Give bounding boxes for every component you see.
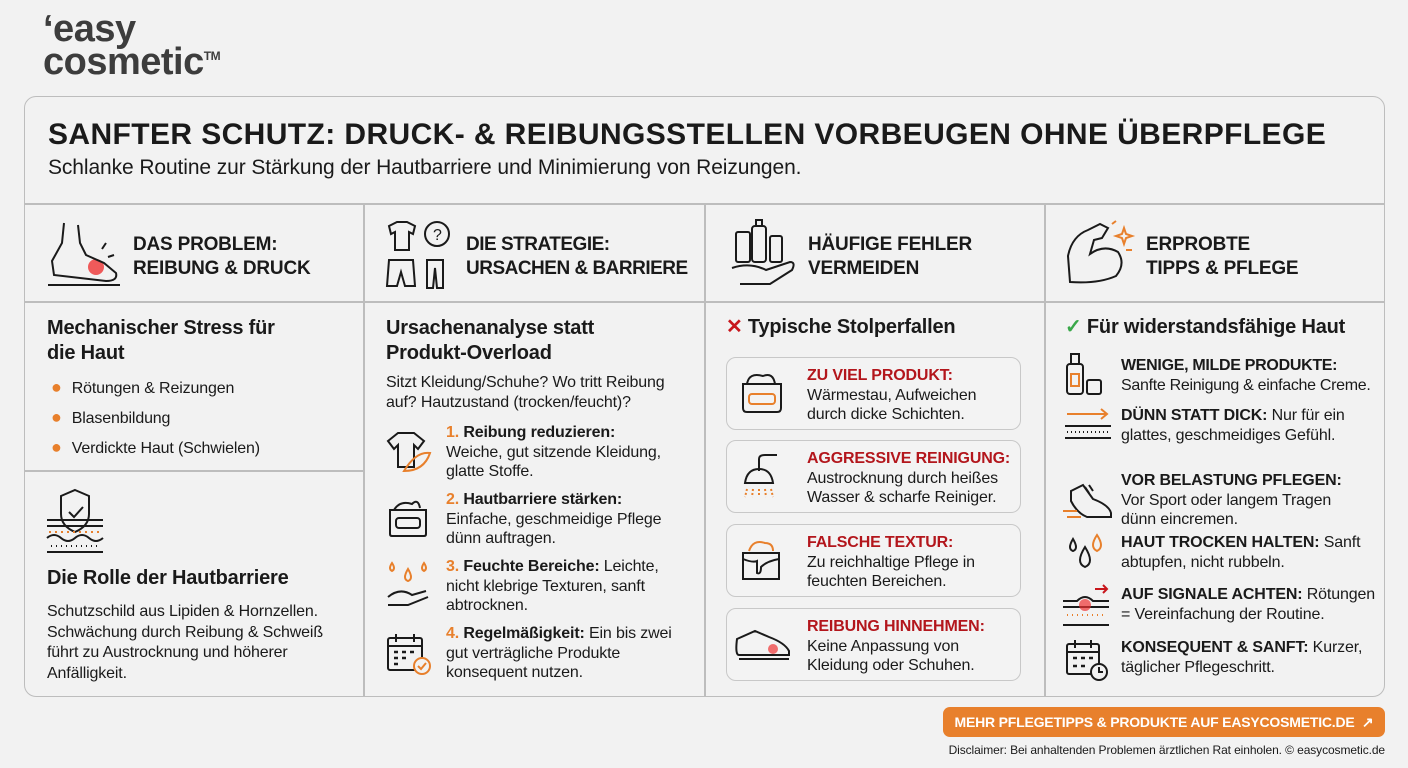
logo: ‘easy: [43, 8, 136, 50]
title: SANFTER SCHUTZ: DRUCK- & REIBUNGSSTELLEN VORBEUGEN OHNE ÜBERPFLEGE: [48, 118, 1326, 151]
box: aggressive reinigung: Austrocknung durch heißes Wasser & scharfe Reiniger.: [807, 470, 998, 506]
tip 4: HAUT TROCKEN HALTEN: Sanft abtupfen, nicht rubbeln.: [1121, 534, 1360, 570]
item 2: 2. Hautbarriere stärken:: [446, 491, 622, 508]
heading: tipps: TIPPS & PFLEGE: [1146, 258, 1298, 279]
panel: hautbarriere: [46, 488, 323, 682]
heading: tipps: ERPROBTE: [1146, 234, 1250, 255]
bullets: ● Verdickte Haut (Schwielen): [51, 437, 260, 457]
tip 2: DÜNN STATT DICK: Nur für ein glattes, geschmeidiges Gefühl.: [1121, 407, 1345, 444]
item 1: 1. Reibung reduzieren:: [446, 424, 615, 441]
box: aggressive reinigung: [726, 440, 1021, 513]
tip 3: [1063, 472, 1342, 528]
tip 1: WENIGE, MILDE PRODUKTE:: [1121, 357, 1337, 374]
heading: problem: [133, 234, 311, 279]
tip 3: Vor Sport oder langem Tragen dünn eincremen.: [1121, 492, 1331, 528]
icon: shield skin: [46, 488, 104, 553]
bullets: ● Rötungen & Reizungen: [51, 377, 234, 397]
logo: [43, 8, 220, 83]
header: fehler: [732, 219, 972, 285]
intro: Sitzt Kleidung/Schuhe? Wo tritt Reibung auf? Hautzustand (trocken/feucht)?: [386, 374, 664, 410]
bullets: ● Blasenbildung: [51, 407, 170, 427]
heading: problem: REIBUNG & DRUCK: [133, 258, 311, 279]
box: aggressive reinigung: AGGRESSIVE REINIGUNG:: [807, 450, 1010, 467]
heading: die Haut: [47, 342, 124, 364]
box: falsche textur: [726, 524, 1021, 597]
grid lines: [24, 203, 1385, 204]
heading: [386, 317, 594, 364]
heading: Die Rolle der Hautbarriere: [47, 567, 289, 589]
icon: foot shoe: [48, 222, 120, 286]
box: zu viel produkt: Wärmestau, Aufweichen durch dicke Schichten.: [807, 386, 976, 423]
heading: Ursachenanalyse statt: [386, 317, 594, 339]
box: reibung hinnehmen: Keine Anpassung von Kleidung oder Schuhen.: [807, 638, 974, 674]
tip 3: VOR BELASTUNG PFLEGEN:: [1121, 472, 1342, 489]
box: reibung hinnehmen: REIBUNG HINNEHMEN:: [807, 618, 985, 635]
heading: Produkt-Overload: [386, 342, 552, 364]
icon: hand with products: [732, 219, 795, 285]
item 4: 4. Regelmäßigkeit: Ein bis zwei gut verträgliche Produkte konsequent nutzen.: [446, 625, 672, 681]
panel: mechanischer stress: [47, 317, 275, 457]
heading: fehler: [808, 233, 972, 279]
button: cta: [943, 707, 1385, 737]
logo: cosmeticTM: [43, 41, 220, 83]
button: cta: MEHR PFLEGETIPPS & PRODUKTE AUF EASYCOSMETIC.DE ↗: [955, 714, 1373, 730]
box: zu viel produkt: [726, 357, 1021, 430]
heading: strategie: [466, 234, 688, 279]
box: reibung hinnehmen: [726, 608, 1021, 681]
tip 1: Sanfte Reinigung & einfache Creme.: [1121, 376, 1371, 394]
icon: clothes: [386, 221, 450, 289]
bullets: [51, 377, 260, 457]
tip 1: [1066, 353, 1371, 395]
disclaimer: Disclaimer: Bei anhaltenden Problemen ärztlichen Rat einholen. © easycosmetic.de: [949, 743, 1385, 757]
item 2: Einfache, geschmeidige Pflege dünn auftragen.: [446, 510, 661, 547]
subtitle: Schlanke Routine zur Stärkung der Hautbarriere und Minimierung von Reizungen.: [48, 156, 801, 179]
heading: [47, 317, 275, 364]
panel: strategie: [386, 317, 672, 681]
item 2: [389, 491, 661, 547]
box: falsche textur: Zu reichhaltige Pflege in feuchten Bereichen.: [807, 554, 975, 590]
tip 6: KONSEQUENT & SANFT: Kurzer, täglicher Pflegeschritt.: [1121, 639, 1362, 676]
heading: fehler: VERMEIDEN: [808, 258, 919, 279]
heading: ✓ Für widerstandsfähige Haut: [1065, 316, 1345, 338]
heading: strategie: URSACHEN & BARRIERE: [466, 258, 688, 279]
box: zu viel produkt: ZU VIEL PRODUKT:: [807, 367, 953, 384]
item 1: Weiche, gut sitzende Kleidung, glatte Stoffe.: [446, 444, 661, 480]
heading: strategie: DIE STRATEGIE:: [466, 234, 610, 255]
heading: tipps: [1146, 234, 1298, 279]
icon: arm muscle: [1067, 220, 1135, 284]
panel: stolperfallen heading: ✕ Typische Stolperfallen: [726, 316, 955, 338]
icon: clothes: ?: [433, 227, 442, 244]
box: falsche textur: FALSCHE TEXTUR:: [807, 534, 953, 551]
header: tipps: [1067, 220, 1298, 284]
item 3: 3. Feuchte Bereiche: Leichte, nicht klebrige Texturen, sanft abtrocknen.: [446, 558, 659, 614]
item 1: [386, 424, 661, 480]
header: strategie: [386, 221, 688, 289]
paragraph: Schutzschild aus Lipiden & Hornzellen. Schwächung durch Reibung & Schweiß führt zu Austrocknung und höherer Anfälligkeit.: [47, 603, 323, 682]
heading: problem: DAS PROBLEM:: [133, 234, 277, 255]
heading: Mechanischer Stress für: [47, 317, 275, 339]
heading: fehler: HÄUFIGE FEHLER: [808, 234, 972, 255]
main card: [24, 96, 1385, 697]
panel: tipps: [1063, 316, 1375, 681]
tip 5: AUF SIGNALE ACHTEN: Rötungen = Vereinfachung der Routine.: [1121, 586, 1375, 622]
header: problem: [48, 222, 311, 286]
